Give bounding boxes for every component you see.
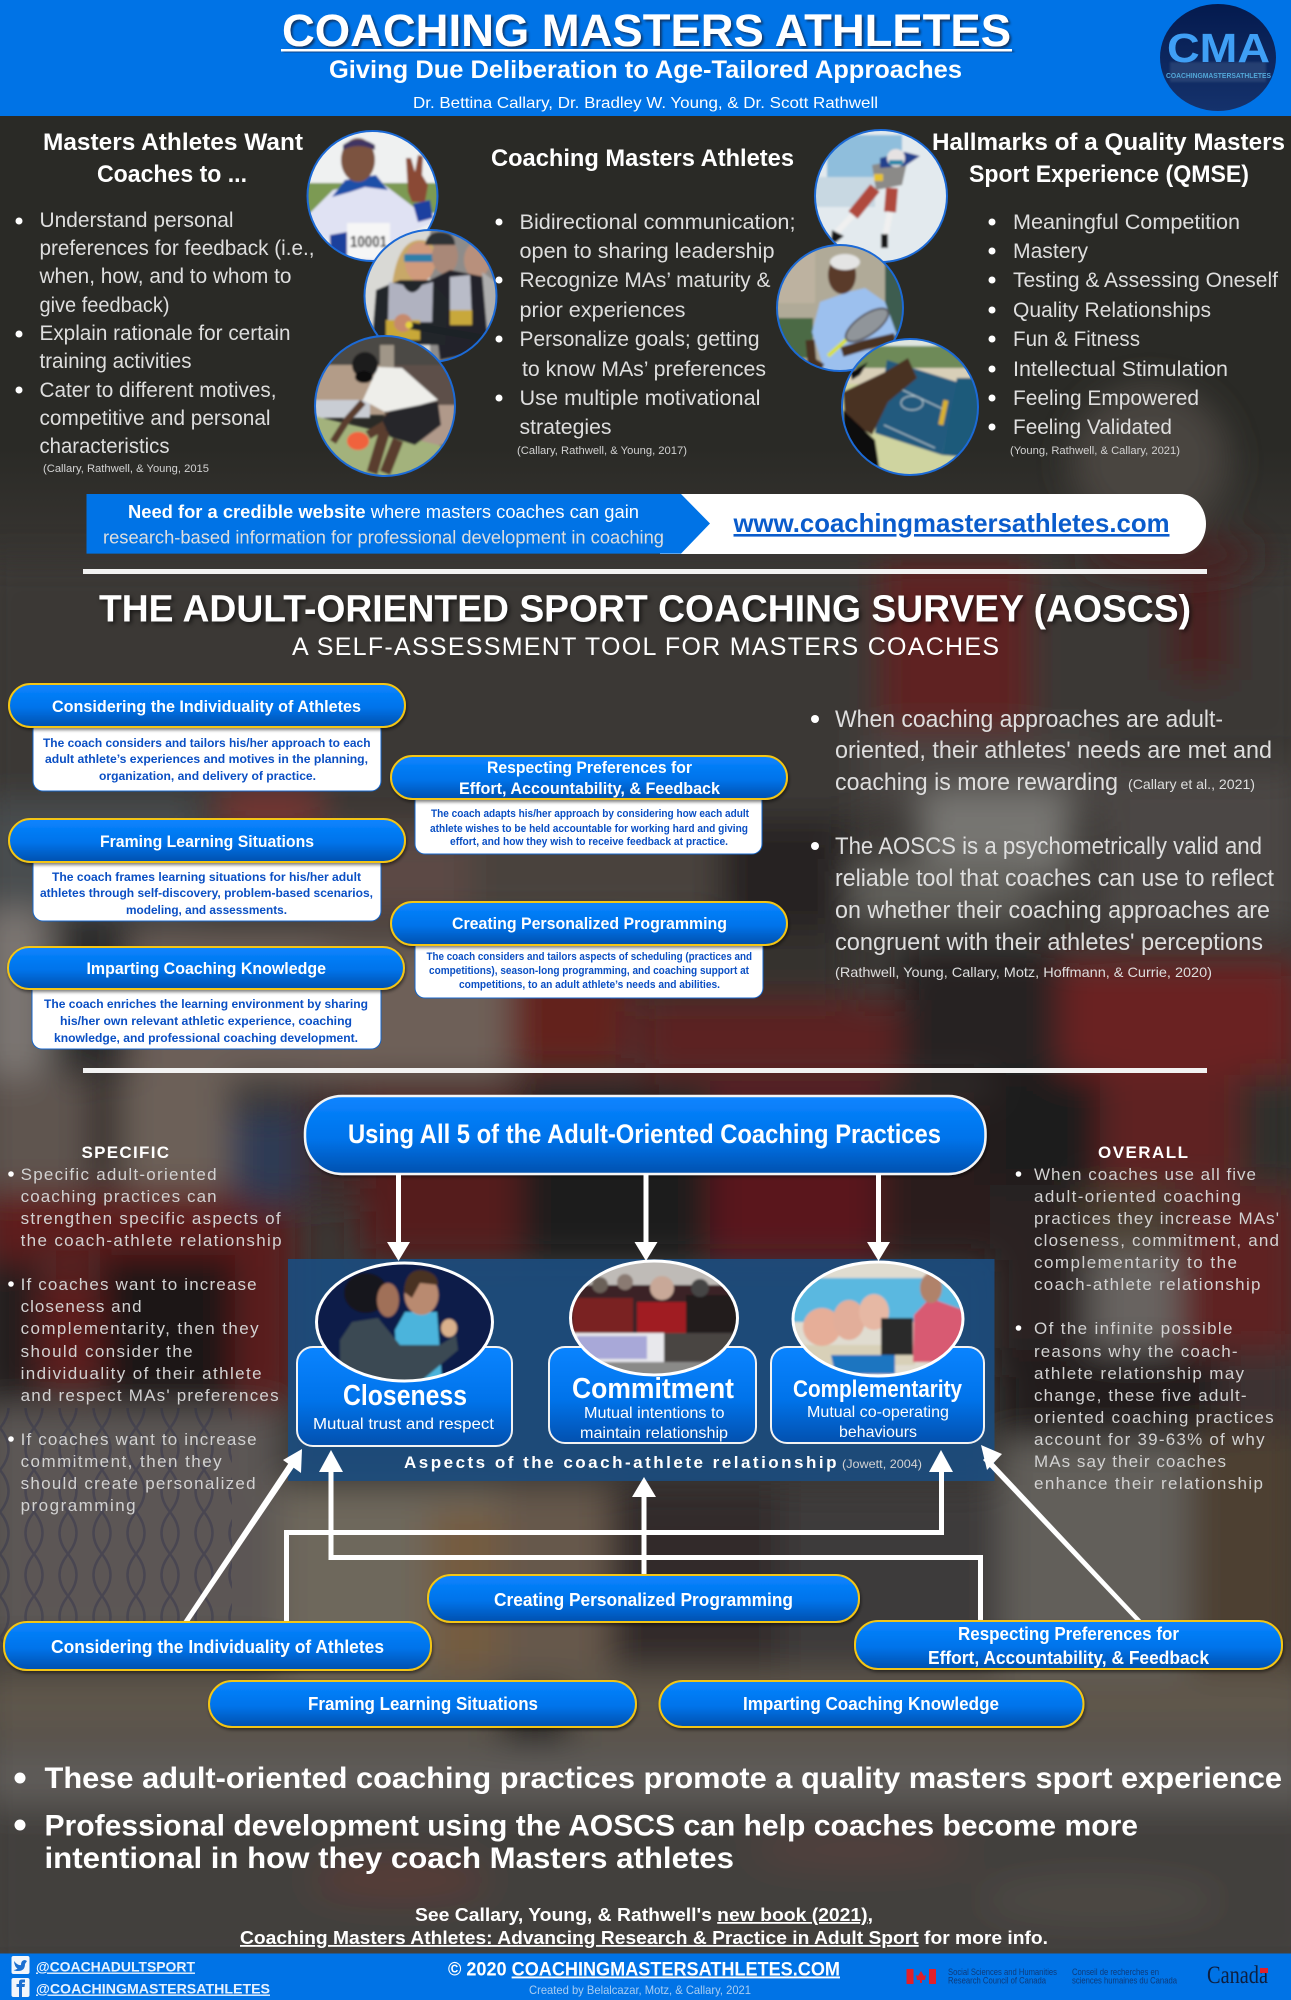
overall bullets: change, these five adult- [1034, 1386, 1246, 1405]
social handles [36, 1958, 270, 1996]
book reference [240, 1905, 1048, 1948]
heading: hallmarks [932, 129, 1285, 188]
photo: rowers [364, 229, 498, 362]
overall bullets: coach-athlete relationship [1034, 1275, 1260, 1294]
funder text: sciences humaines du Canada [1072, 1976, 1177, 1986]
main title: COACHING MASTERS ATHLETES [282, 5, 1011, 56]
description box: modeling, and assessments. [126, 903, 287, 917]
pill heading [9, 684, 405, 727]
panel: coaching masters athletes [491, 145, 796, 457]
bullet list: hallmarks: Testing & Assessing Oneself [1013, 269, 1278, 292]
bullet list: hallmarks [988, 211, 1278, 439]
text block: AOSCS benefits: When coaching approaches are adult- [835, 706, 1223, 733]
heading: want coaches to [43, 129, 303, 188]
pill heading [9, 819, 405, 862]
description box [33, 720, 381, 791]
specific bullets: individuality of their athlete [21, 1364, 262, 1383]
overall bullets: practices they increase MAs' [1034, 1209, 1279, 1228]
text block: AOSCS benefits: oriented, their athletes' needs are met and [835, 737, 1272, 764]
pill: creating personalized programming: Creating Personalized Programming [494, 1590, 793, 1610]
heading: want coaches to: Masters Athletes Want [43, 129, 303, 156]
pill: respecting preferences [855, 1621, 1282, 1669]
description box: effort, and how they wish to receive feedback at practice. [450, 836, 728, 848]
aspect card: closeness: Mutual trust and respect [313, 1416, 495, 1433]
description box: The coach adapts his/her approach by considering how each adult [431, 808, 749, 820]
practice: respecting preferences [391, 756, 787, 854]
bullet list: wants: Cater to different motives, [40, 379, 276, 402]
bullet list: coaching: prior experiences [520, 299, 686, 322]
text block: AOSCS benefits: coaching is more rewarding [835, 769, 1118, 796]
text block: AOSCS benefits: on whether their coaching approaches are [835, 897, 1270, 924]
pill heading: Effort, Accountability, & Feedback [459, 779, 721, 798]
AOSCS title [99, 588, 1191, 661]
pill: framing learning [209, 1681, 636, 1727]
logo: CMA: CMA [1167, 25, 1270, 71]
aspect card: complementarity: Mutual co-operating [807, 1404, 949, 1421]
social handles: @COACHADULTSPORT [36, 1958, 195, 1974]
aspect card: commitment: Mutual intentions to [584, 1405, 725, 1422]
website banner: research-based information for professional development in coaching [103, 528, 664, 548]
overall bullets: complementarity to the [1034, 1253, 1237, 1272]
heading: want coaches to: Coaches to ... [97, 161, 247, 188]
bullet list: hallmarks: Quality Relationships [1013, 299, 1211, 322]
arrows: top pill to aspects [387, 1174, 890, 1261]
description box: competitions), season-long programming, and coaching support at [429, 965, 749, 977]
bullet list: hallmarks: Fun & Fitness [1013, 328, 1140, 351]
photo: complementarity [790, 1260, 966, 1378]
specific bullets: complementarity, then they [21, 1319, 259, 1338]
pill heading: Respecting Preferences for [487, 758, 692, 777]
social handles: @COACHINGMASTERSATHLETES [36, 1980, 270, 1996]
caption: aspects of relationship: (Jowett, 2004) [842, 1457, 922, 1471]
book reference: See Callary, Young, & Rathwell's new book (2021) , [415, 1905, 873, 1925]
aspect card: complementarity [771, 1260, 984, 1443]
bullet list: coaching: to know MAs’ preferences [522, 358, 766, 381]
pill heading: Creating Personalized Programming [452, 914, 727, 933]
description box: adult athlete’s experiences and motives in the planning, [45, 752, 368, 766]
icon: twitter [12, 1956, 30, 1974]
specific bullets: Specific adult-oriented [21, 1165, 217, 1184]
citation: (Young, Rathwell, & Callary, 2021) [1010, 445, 1180, 457]
aspect card: complementarity: Complementarity [793, 1376, 963, 1403]
photo: athlete with bib: 10001 [350, 234, 387, 251]
column: overall [1016, 1143, 1279, 1493]
bullet list: coaching: open to sharing leadership [520, 240, 774, 263]
pill heading [8, 947, 404, 989]
overall bullets: oriented coaching practices [1034, 1408, 1274, 1427]
photo: masked athlete with cone [310, 335, 460, 480]
bullet list: coaching: Recognize MAs’ maturity & [520, 269, 770, 292]
overall bullets: closeness, commitment, and [1034, 1231, 1279, 1250]
top pill: using all 5: Using All 5 of the Adult-Oriented Coaching Practices [348, 1119, 941, 1149]
aspect card: commitment [549, 1260, 756, 1443]
citation: (Callary, Rathwell, & Young, 2015 [43, 463, 209, 475]
footer band [0, 1954, 1291, 2000]
column: specific [8, 1143, 282, 1515]
copyright: © 2020 COACHINGMASTERSATHLETES.COM [448, 1960, 840, 1980]
overall bullets: reasons why the coach- [1034, 1342, 1238, 1361]
text block: AOSCS benefits: The AOSCS is a psychometrically valid and [835, 833, 1262, 860]
overall bullets: MAs say their coaches [1034, 1452, 1226, 1471]
text block: AOSCS benefits: (Callary et al., 2021) [1128, 776, 1255, 792]
text block: AOSCS benefits: congruent with their athletes' perceptions [835, 929, 1263, 956]
pill heading [391, 902, 787, 945]
bullet list: wants: preferences for feedback (i.e., [40, 237, 314, 260]
icon: canadian flag [906, 1969, 936, 1984]
funder text: Conseil de recherches en [1072, 1967, 1159, 1977]
specific bullets [8, 1165, 282, 1515]
AOSCS title: A SELF-ASSESSMENT TOOL FOR MASTERS COACHES [292, 633, 999, 661]
heading: overall: OVERALL [1098, 1143, 1188, 1162]
description box: athletes through self-discovery, problem-based scenarios, [40, 886, 373, 900]
AOSCS title: THE ADULT-ORIENTED SPORT COACHING SURVEY (AOSCS) [99, 588, 1191, 630]
overall bullets: athlete relationship may [1034, 1364, 1244, 1383]
overall bullets: account for 39-63% of why [1034, 1430, 1265, 1449]
pill: respecting preferences: Respecting Preferences for [958, 1624, 1179, 1644]
copyright [448, 1960, 840, 1997]
description box: The coach considers and tailors his/her approach to each [43, 736, 370, 750]
bullet list: hallmarks: Meaningful Competition [1013, 211, 1240, 234]
specific bullets: strengthen specific aspects of [21, 1209, 281, 1228]
aspect card: complementarity: behaviours [839, 1424, 917, 1441]
pill heading [391, 756, 787, 799]
aspect card: commitment: Commitment [572, 1373, 734, 1405]
text block: AOSCS benefits [811, 706, 1274, 980]
arrows: practices to aspects [183, 1445, 1143, 1622]
practice: creating programming [391, 902, 787, 998]
icon: facebook [12, 1978, 30, 1997]
panel: masters athletes want [16, 129, 314, 475]
blue panel: relationship aspects [288, 1259, 994, 1481]
bullet list: coaching: Use multiple motivational [520, 387, 760, 410]
top pill: using all 5 [305, 1096, 986, 1174]
description box [33, 850, 381, 921]
takeaways [14, 1762, 1282, 1875]
takeaways: These adult-oriented coaching practices promote a quality masters sport experience [44, 1762, 1282, 1795]
funder text [948, 1967, 1177, 1986]
copyright: Created by Belalcazar, Motz, & Callary, 2021 [529, 1983, 751, 1997]
heading: hallmarks: Hallmarks of a Quality Masters [932, 129, 1285, 156]
bullet list: wants [16, 209, 314, 458]
bullet list: wants: Explain rationale for certain [40, 322, 290, 345]
caption: aspects of relationship: Aspects of the coach-athlete relationship [404, 1453, 836, 1472]
description box: organization, and delivery of practice. [99, 769, 316, 783]
pill heading: Imparting Coaching Knowledge [86, 959, 326, 978]
logo: CMA: COACHINGMASTERSATHLETES [1166, 71, 1271, 80]
website banner [86, 494, 1206, 554]
bullet list: wants: competitive and personal [40, 407, 270, 430]
aspect card: commitment: maintain relationship [580, 1425, 728, 1442]
book reference: Coaching Masters Athletes: Advancing Research & Practice in Adult Sport for more info. [240, 1928, 1048, 1948]
bullet list: wants: training activities [40, 350, 192, 373]
background photo [0, 376, 1291, 1954]
canada wordmark: Canada [1207, 1962, 1268, 1989]
pill: imparting knowledge: Imparting Coaching Knowledge [743, 1694, 999, 1714]
funder text: Research Council of Canada [948, 1976, 1046, 1986]
practice: imparting knowledge [8, 947, 404, 1049]
specific bullets: programming [21, 1496, 136, 1515]
specific bullets: If coaches want to increase [21, 1275, 257, 1294]
description box: knowledge, and professional coaching development. [54, 1031, 358, 1045]
pill: considering individuality [4, 1622, 431, 1670]
pill: framing learning: Framing Learning Situations [308, 1694, 538, 1714]
practice: considering individuality [9, 684, 405, 791]
description box: his/her own relevant athletic experience, coaching [60, 1014, 352, 1028]
panel: hallmarks of QMSE [932, 129, 1285, 457]
description box: competitions, to an adult athlete’s needs and abilities. [459, 979, 720, 991]
photo: tactics board [840, 338, 980, 480]
specific bullets: the coach-athlete relationship [21, 1231, 282, 1250]
specific bullets: should create personalized [21, 1474, 256, 1493]
overall bullets: Of the infinite possible [1034, 1319, 1232, 1338]
pill: imparting knowledge [660, 1681, 1084, 1727]
takeaways: intentional in how they coach Masters athletes [44, 1842, 734, 1875]
takeaways: Professional development using the AOSCS can help coaches become more [44, 1810, 1138, 1842]
description box: The coach enriches the learning environment by sharing [44, 997, 368, 1011]
bullet list: wants: when, how, and to whom to [39, 265, 291, 288]
photo: speed skater [814, 129, 948, 263]
pill heading: Framing Learning Situations [100, 832, 314, 851]
photo: tennis player [775, 243, 905, 375]
header band [0, 0, 1291, 116]
bullet list: wants: Understand personal [40, 209, 234, 232]
pill: considering individuality: Considering the Individuality of Athletes [51, 1637, 384, 1657]
aspect card: closeness: Closeness [343, 1380, 467, 1412]
bullet list: coaching: Bidirectional communication; [520, 211, 796, 234]
specific bullets: If coaches want to increase [21, 1430, 257, 1449]
heading: hallmarks: Sport Experience (QMSE) [969, 161, 1249, 188]
description box [415, 786, 762, 854]
overall bullets: adult-oriented coaching [1034, 1187, 1241, 1206]
funder text: Social Sciences and Humanities [948, 1967, 1057, 1977]
description box: The coach frames learning situations for his/her adult [52, 870, 361, 884]
pill: creating personalized programming [428, 1575, 859, 1622]
website banner: www.coachingmastersathletes.com [733, 508, 1170, 538]
heading: coaching masters athletes: Coaching Masters Athletes [491, 145, 794, 172]
description box [415, 934, 763, 998]
specific bullets: should consider the [21, 1342, 193, 1361]
photo: commitment [568, 1260, 740, 1378]
bullet list: coaching [496, 211, 796, 439]
logo: CMA [1160, 4, 1276, 111]
authors: Dr. Bettina Callary, Dr. Bradley W. Young, & Dr. Scott Rathwell [413, 95, 878, 112]
bullet list: coaching: Personalize goals; getting [520, 328, 760, 351]
description box: The coach considers and tailors aspects of scheduling (practices and [426, 951, 752, 963]
specific bullets: and respect MAs' preferences [21, 1386, 279, 1405]
description box [32, 978, 381, 1049]
bullet list: hallmarks: Feeling Empowered [1013, 387, 1199, 410]
specific bullets: commitment, then they [21, 1452, 222, 1471]
subtitle: Giving Due Deliberation to Age-Tailored Approaches [329, 56, 962, 84]
citation: (Callary, Rathwell, & Young, 2017) [517, 445, 687, 457]
bullet list: hallmarks: Intellectual Stimulation [1013, 358, 1228, 381]
photo: closeness [315, 1262, 495, 1382]
aspect card: closeness [297, 1262, 512, 1446]
description box: athlete wishes to be held accountable for working hard and giving [430, 823, 748, 835]
overall bullets [1016, 1165, 1279, 1493]
specific bullets: closeness and [21, 1297, 142, 1316]
overall bullets: When coaches use all five [1034, 1165, 1256, 1184]
text block: AOSCS benefits: (Rathwell, Young, Callary, Motz, Hoffmann, & Currie, 2020) [835, 964, 1212, 980]
bullet list: hallmarks: Mastery [1013, 240, 1088, 263]
bullet list: coaching: strategies [520, 416, 612, 439]
website banner: Need for a credible website where masters coaches can gain [128, 502, 639, 522]
photo: athlete with bib [306, 130, 438, 262]
heading: specific: SPECIFIC [82, 1143, 169, 1162]
bullet list: hallmarks: Feeling Validated [1013, 416, 1172, 439]
specific bullets: coaching practices can [21, 1187, 217, 1206]
text block: AOSCS benefits: reliable tool that coaches can use to reflect [835, 865, 1274, 892]
overall bullets: enhance their relationship [1034, 1474, 1263, 1493]
bullet list: wants: give feedback) [40, 294, 170, 317]
pill heading: Considering the Individuality of Athletes [52, 697, 361, 716]
pill: respecting preferences: Effort, Accountability, & Feedback [928, 1648, 1210, 1668]
practice: framing learning [9, 819, 405, 921]
bullet list: wants: characteristics [40, 435, 170, 458]
